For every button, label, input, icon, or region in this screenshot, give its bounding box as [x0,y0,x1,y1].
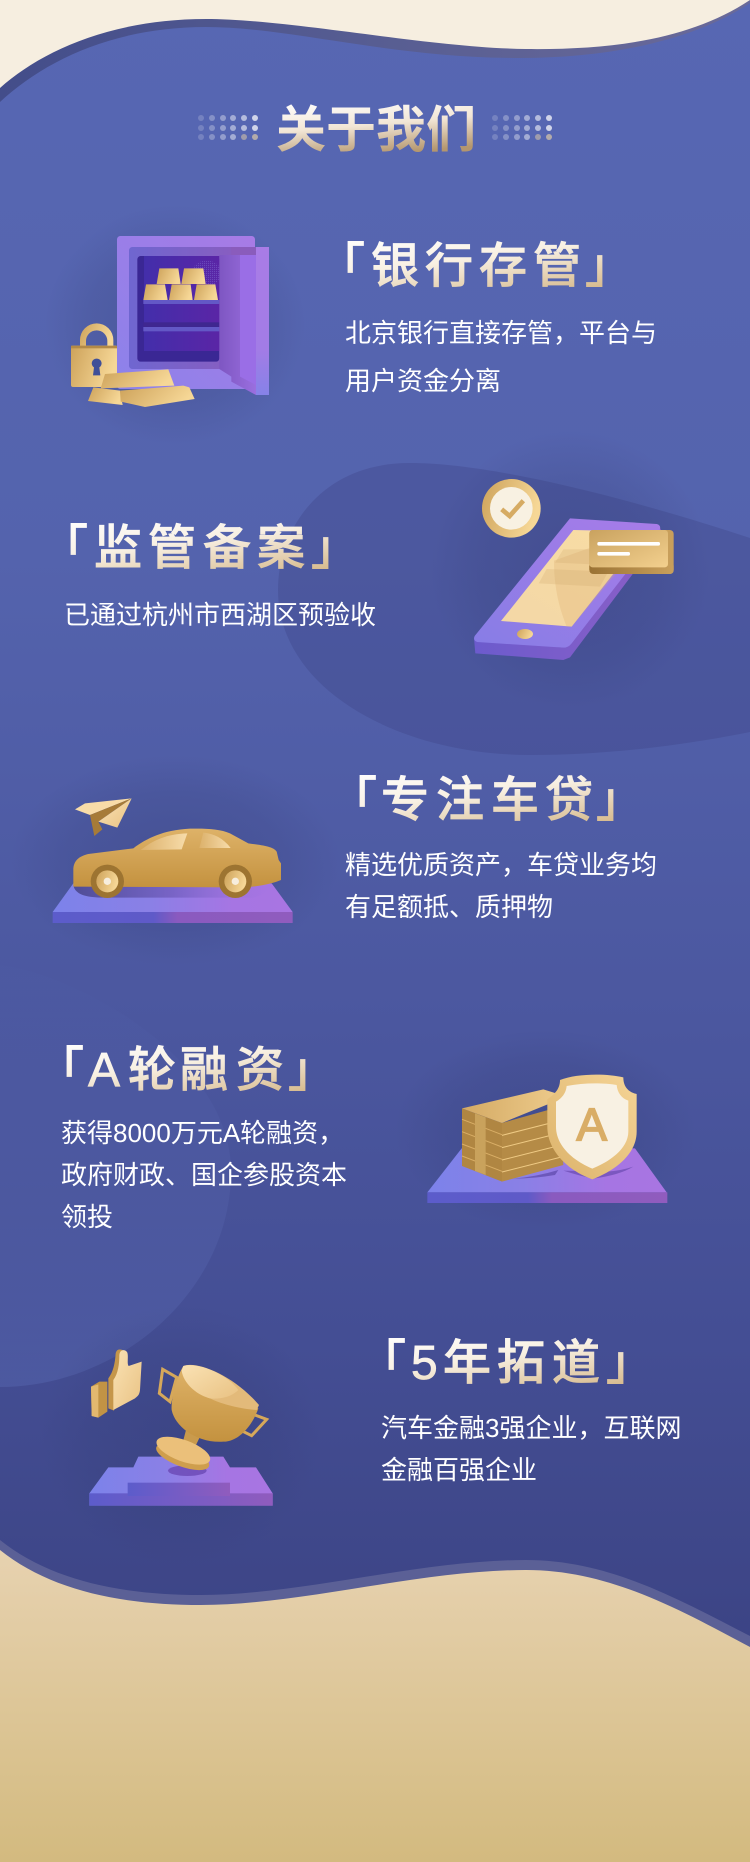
body text [381,1413,681,1485]
top cream wave [0,0,750,102]
icon: trophy, thumbs up and podium [89,1349,273,1506]
title: 「监管备案」 [40,522,359,575]
icon: phone with card and check badge [474,479,674,660]
section: series A funding [36,1030,695,1232]
icon: money stack and shield on platform [427,1075,667,1203]
body text: 金融百强企业 [381,1455,537,1485]
body text: 精选优质资产，车贷业务均 [345,850,657,880]
icon: money stack and shield on platform: A [576,1099,607,1150]
heading text: 关于我们 [276,102,476,158]
title: 「5年拓道」 [358,1337,654,1390]
heading: about us [198,102,552,158]
body text: 领投 [61,1202,113,1232]
body text [61,1118,347,1232]
body text: 用户资金分离 [345,366,501,396]
icon: car on platform with paper plane [53,798,293,923]
body text: 获得8000万元A轮融资， [61,1118,344,1148]
body text: 汽车金融3强企业，互联网 [381,1413,681,1443]
section: regulatory filing [40,430,710,710]
title: 「A轮融资」 [36,1044,336,1097]
background blob right [278,463,750,755]
section: bank custody [45,205,657,445]
body text: 已通过杭州市西湖区预验收 [64,600,376,630]
body text: 有足额抵、质押物 [345,892,553,922]
body text: 政府财政、国企参股资本 [61,1160,347,1190]
bottom sand wave [0,1540,750,1862]
title: 「专注车贷」 [329,774,644,827]
body text [345,318,657,396]
icon: safe with gold [71,236,269,407]
body text: 北京银行直接存管，平台与 [345,318,657,348]
title: 「银行存管」 [317,240,633,293]
section: car loans [10,755,657,965]
section: five years [40,1305,681,1565]
body text [345,850,657,922]
right dot grid [492,115,552,140]
left dot grid [198,115,258,140]
background blob left [0,965,231,1387]
